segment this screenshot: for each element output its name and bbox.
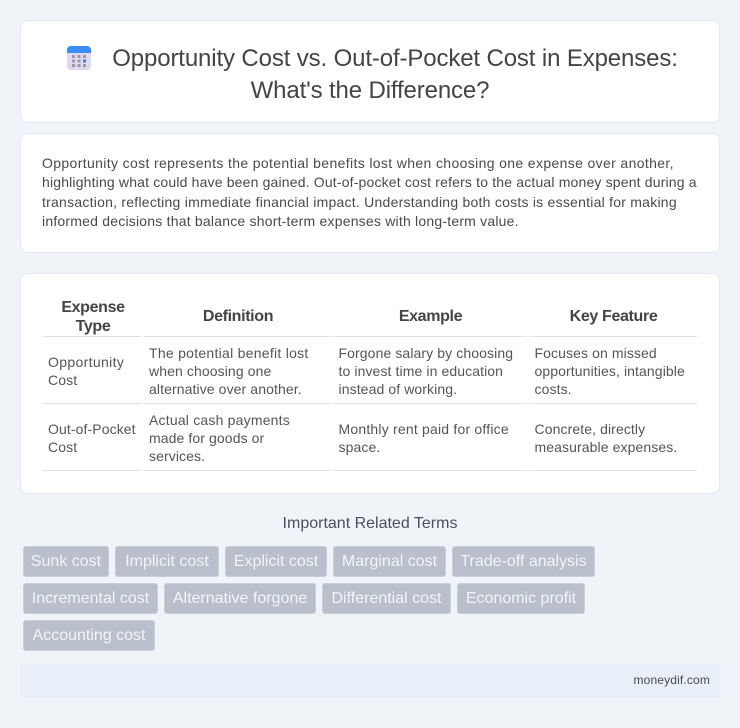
- header: key feature: Key Feature: [570, 308, 657, 325]
- description text: transaction, reflecting immediate financial impact. Understanding both costs is essential for making: [42, 194, 677, 210]
- header: example: Example: [399, 308, 462, 325]
- tag: Sunk cost: [31, 553, 101, 570]
- row: out-of-pocket cost: Concrete, directly: [534, 421, 645, 437]
- tag: Implicit cost: [125, 553, 209, 570]
- tag: [452, 546, 595, 577]
- row: opportunity cost: when choosing one: [149, 363, 271, 379]
- tag: Economic profit: [466, 590, 576, 607]
- tag: [115, 546, 219, 577]
- row: opportunity cost: The potential benefit lost: [149, 345, 309, 361]
- row: opportunity cost: Focuses on missed: [534, 345, 657, 361]
- tag: Differential cost: [332, 590, 441, 607]
- row: out-of-pocket cost: made for goods or: [149, 430, 264, 446]
- title: Opportunity Cost vs. Out-of-Pocket Cost in Expenses:: [112, 45, 678, 72]
- description text: informed decisions that balance short-term expenses with long-term value.: [42, 213, 519, 229]
- row: opportunity cost: Forgone salary by choosing: [338, 345, 513, 361]
- header: expense type: Expense: [61, 299, 125, 316]
- header: definition: Definition: [203, 308, 273, 325]
- row: out-of-pocket cost: space.: [338, 439, 380, 455]
- related terms tags: [23, 546, 595, 651]
- row: opportunity cost: Opportunity: [48, 354, 124, 370]
- tag: Marginal cost: [342, 553, 437, 570]
- description text: Opportunity cost represents the potential benefits lost when choosing one expense over another,: [42, 155, 674, 171]
- tag: [457, 583, 585, 614]
- row: opportunity cost: [48, 345, 685, 397]
- tag: [322, 583, 451, 614]
- tag: Explicit cost: [234, 553, 318, 570]
- row: out-of-pocket cost: Cost: [48, 439, 77, 455]
- tag: [333, 546, 446, 577]
- title: What's the Difference?: [251, 77, 489, 104]
- row: opportunity cost: costs.: [534, 381, 572, 397]
- tag: [164, 583, 316, 614]
- description text: [42, 155, 697, 229]
- tag: Incremental cost: [32, 590, 149, 607]
- footer bar: [20, 664, 720, 698]
- tag: [23, 546, 109, 577]
- tag: Accounting cost: [33, 627, 145, 644]
- description card: [20, 133, 720, 253]
- row: opportunity cost: alternative over another.: [149, 381, 302, 397]
- header: expense type: [61, 299, 125, 335]
- row: out-of-pocket cost: measurable expenses.: [534, 439, 677, 455]
- row: out-of-pocket cost: Actual cash payments: [149, 412, 290, 428]
- icon: calendar: [67, 46, 91, 70]
- row: opportunity cost: to invest time in education: [338, 363, 503, 379]
- row: out-of-pocket cost: Out-of-Pocket: [48, 421, 136, 437]
- header card: [20, 20, 720, 123]
- row: out-of-pocket cost: services.: [149, 448, 205, 464]
- row: opportunity cost: Cost: [48, 372, 77, 388]
- tag: [225, 546, 327, 577]
- tag: [23, 620, 155, 651]
- tag: Alternative forgone: [173, 590, 307, 607]
- comparison table: [43, 299, 697, 471]
- footer source: moneydif.com: [634, 673, 710, 687]
- related terms heading: Important Related Terms: [283, 515, 457, 532]
- row: opportunity cost: instead of working.: [338, 381, 457, 397]
- title: [112, 45, 678, 104]
- row: opportunity cost: opportunities, intangible: [534, 363, 685, 379]
- header: expense type: Type: [76, 318, 110, 335]
- table card: [20, 273, 720, 494]
- description text: highlighting what could have been gained. Out-of-pocket cost refers to the actual money spent during a: [42, 174, 697, 190]
- row: out-of-pocket cost: Monthly rent paid for office: [338, 421, 509, 437]
- row: out-of-pocket cost: [48, 412, 677, 464]
- tag: Trade-off analysis: [460, 553, 587, 570]
- tag: [23, 583, 158, 614]
